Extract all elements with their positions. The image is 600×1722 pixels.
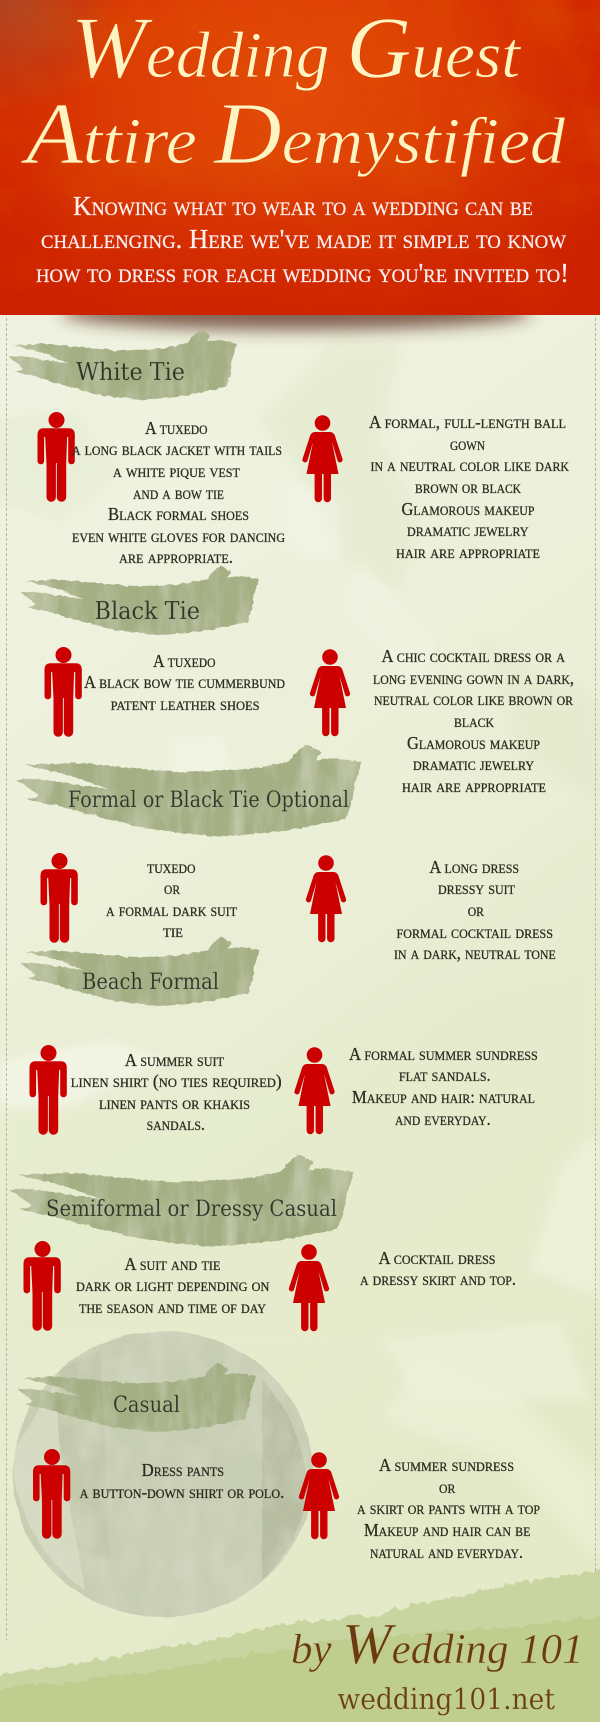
men's attire text: and a bow tie	[133, 483, 224, 503]
men's attire text: a long black jacket with tails	[72, 439, 282, 459]
icon: man	[24, 1241, 61, 1331]
icon: man	[33, 1449, 70, 1539]
women's attire text: A cocktail dress	[378, 1248, 496, 1268]
header shadow	[61, 296, 531, 330]
icon: man	[30, 1045, 67, 1135]
footer green wash	[0, 1568, 600, 1722]
women's attire text: in a neutral color like dark	[370, 455, 570, 475]
icon: woman	[310, 649, 350, 736]
heading: Formal or Black Tie Optional	[68, 788, 349, 813]
men's attire text: linen pants or khakis	[99, 1093, 250, 1113]
men's attire text: A tuxedo	[145, 418, 208, 438]
intro text: Knowing what to wear to a wedding can be	[73, 191, 533, 221]
women's attire text	[373, 646, 574, 796]
icon: woman	[289, 1244, 329, 1331]
women's attire text: Makeup and hair: natural	[352, 1087, 535, 1107]
men's attire text: tie	[163, 921, 183, 941]
brush stroke heading background	[18, 1363, 256, 1432]
brush stroke heading background	[21, 937, 260, 1006]
men's attire text: a formal dark suit	[106, 900, 237, 920]
men's attire text: A tuxedo	[153, 651, 216, 671]
section: white tie	[9, 330, 570, 567]
women's attire text: long evening gown in a dark,	[373, 668, 574, 688]
women's attire text	[360, 1248, 516, 1289]
byline: by Wedding 101	[291, 1611, 584, 1676]
icon: man	[44, 647, 82, 737]
women's attire text: flat sandals.	[399, 1065, 491, 1085]
men's attire text: the season and time of day	[79, 1297, 267, 1317]
title: Wedding Guest	[71, 0, 522, 97]
women's attire text	[349, 1044, 538, 1129]
women's attire text: dramatic jewelry	[413, 754, 535, 774]
men's attire text: patent leather shoes	[111, 694, 260, 714]
casual watercolor circle	[13, 1331, 313, 1617]
men's attire text	[84, 651, 285, 714]
women's attire text: A formal, full-length ball	[369, 412, 566, 432]
intro text: challenging. Here we've made it simple to know	[41, 224, 566, 254]
women's attire text: or	[439, 1477, 456, 1497]
section: semiformal or dressy casual	[10, 1155, 516, 1331]
men's attire text: dark or light depending on	[76, 1275, 270, 1295]
section: beach formal	[21, 937, 538, 1135]
women's attire text: and everyday.	[395, 1109, 491, 1129]
brush stroke heading background	[21, 566, 259, 635]
women's attire text: a skirt or pants with a top	[357, 1498, 540, 1518]
icon: woman	[306, 855, 346, 942]
section: casual	[18, 1363, 540, 1562]
men's attire text	[71, 1050, 282, 1134]
dashed border lines	[6, 318, 596, 1640]
men's attire text: Dress pants	[142, 1460, 224, 1480]
men's attire text: are appropriate.	[119, 547, 233, 567]
section: formal or black tie optional	[17, 745, 556, 963]
icon: woman	[294, 1047, 335, 1134]
heading: Casual	[113, 1393, 180, 1418]
intro text: how to dress for each wedding you're invited to!	[36, 258, 569, 288]
intro text	[36, 191, 569, 288]
men's attire text: Black formal shoes	[108, 504, 249, 524]
women's attire text: hair are appropriate	[396, 542, 540, 562]
women's attire text: Glamorous makeup	[407, 733, 540, 753]
men's attire text	[80, 1460, 284, 1502]
men's attire text: a button-down shirt or polo.	[80, 1482, 284, 1502]
women's attire text: dramatic jewelry	[407, 520, 529, 540]
men's attire text: or	[164, 878, 180, 898]
men's attire text: tuxedo	[147, 857, 196, 877]
women's attire text: Makeup and hair can be	[364, 1520, 530, 1540]
men's attire text: A suit and tie	[124, 1254, 220, 1274]
heading: White Tie	[76, 358, 185, 386]
heading: Black Tie	[94, 597, 200, 625]
men's attire text: sandals.	[147, 1114, 205, 1134]
heading: Beach Formal	[82, 970, 219, 995]
women's attire text: neutral color like brown or	[374, 689, 573, 709]
women's attire text: Glamorous makeup	[402, 499, 534, 519]
men's attire text	[106, 857, 237, 941]
women's attire text: hair are appropriate	[402, 776, 546, 796]
women's attire text: natural and everyday.	[370, 1542, 523, 1562]
women's attire text: A summer sundress	[379, 1455, 514, 1475]
header panel	[0, 0, 600, 315]
women's attire text: in a dark, neutral tone	[394, 943, 556, 963]
icon: woman	[299, 1452, 339, 1539]
title	[21, 0, 566, 183]
women's attire text	[369, 412, 570, 562]
women's attire text: A long dress	[429, 857, 519, 877]
women's attire text	[357, 1455, 540, 1562]
men's attire text	[72, 418, 285, 567]
women's attire text: black	[454, 711, 495, 731]
icon: woman	[302, 415, 343, 502]
women's attire text	[394, 857, 556, 963]
section: black tie	[21, 566, 574, 796]
men's attire text: a white pique vest	[113, 461, 240, 481]
brush stroke heading background	[9, 330, 237, 400]
women's attire text: formal cocktail dress	[396, 922, 553, 942]
women's attire text: A formal summer sundress	[349, 1044, 538, 1064]
women's attire text: gown	[450, 434, 486, 454]
icon: man	[38, 412, 75, 502]
men's attire text: A summer suit	[125, 1050, 224, 1070]
women's attire text: a dressy skirt and top.	[360, 1269, 516, 1289]
brush stroke heading background	[17, 745, 362, 837]
women's attire text: or	[468, 900, 484, 920]
title: Attire Demystified	[21, 86, 566, 183]
heading: Semiformal or Dressy Casual	[46, 1197, 337, 1222]
men's attire text: A black bow tie cummerbund	[84, 672, 285, 692]
men's attire text: linen shirt (no ties required)	[71, 1071, 282, 1092]
men's attire text: even white gloves for dancing	[72, 526, 285, 546]
website: wedding101.net	[338, 1682, 555, 1716]
icon: man	[40, 853, 78, 943]
women's attire text: dressy suit	[438, 878, 515, 898]
men's attire text	[76, 1254, 270, 1317]
women's attire text: A chic cocktail dress or a	[382, 646, 566, 666]
women's attire text: brown or black	[415, 477, 522, 497]
brush stroke heading background	[10, 1155, 354, 1247]
footer credit	[291, 1611, 584, 1716]
